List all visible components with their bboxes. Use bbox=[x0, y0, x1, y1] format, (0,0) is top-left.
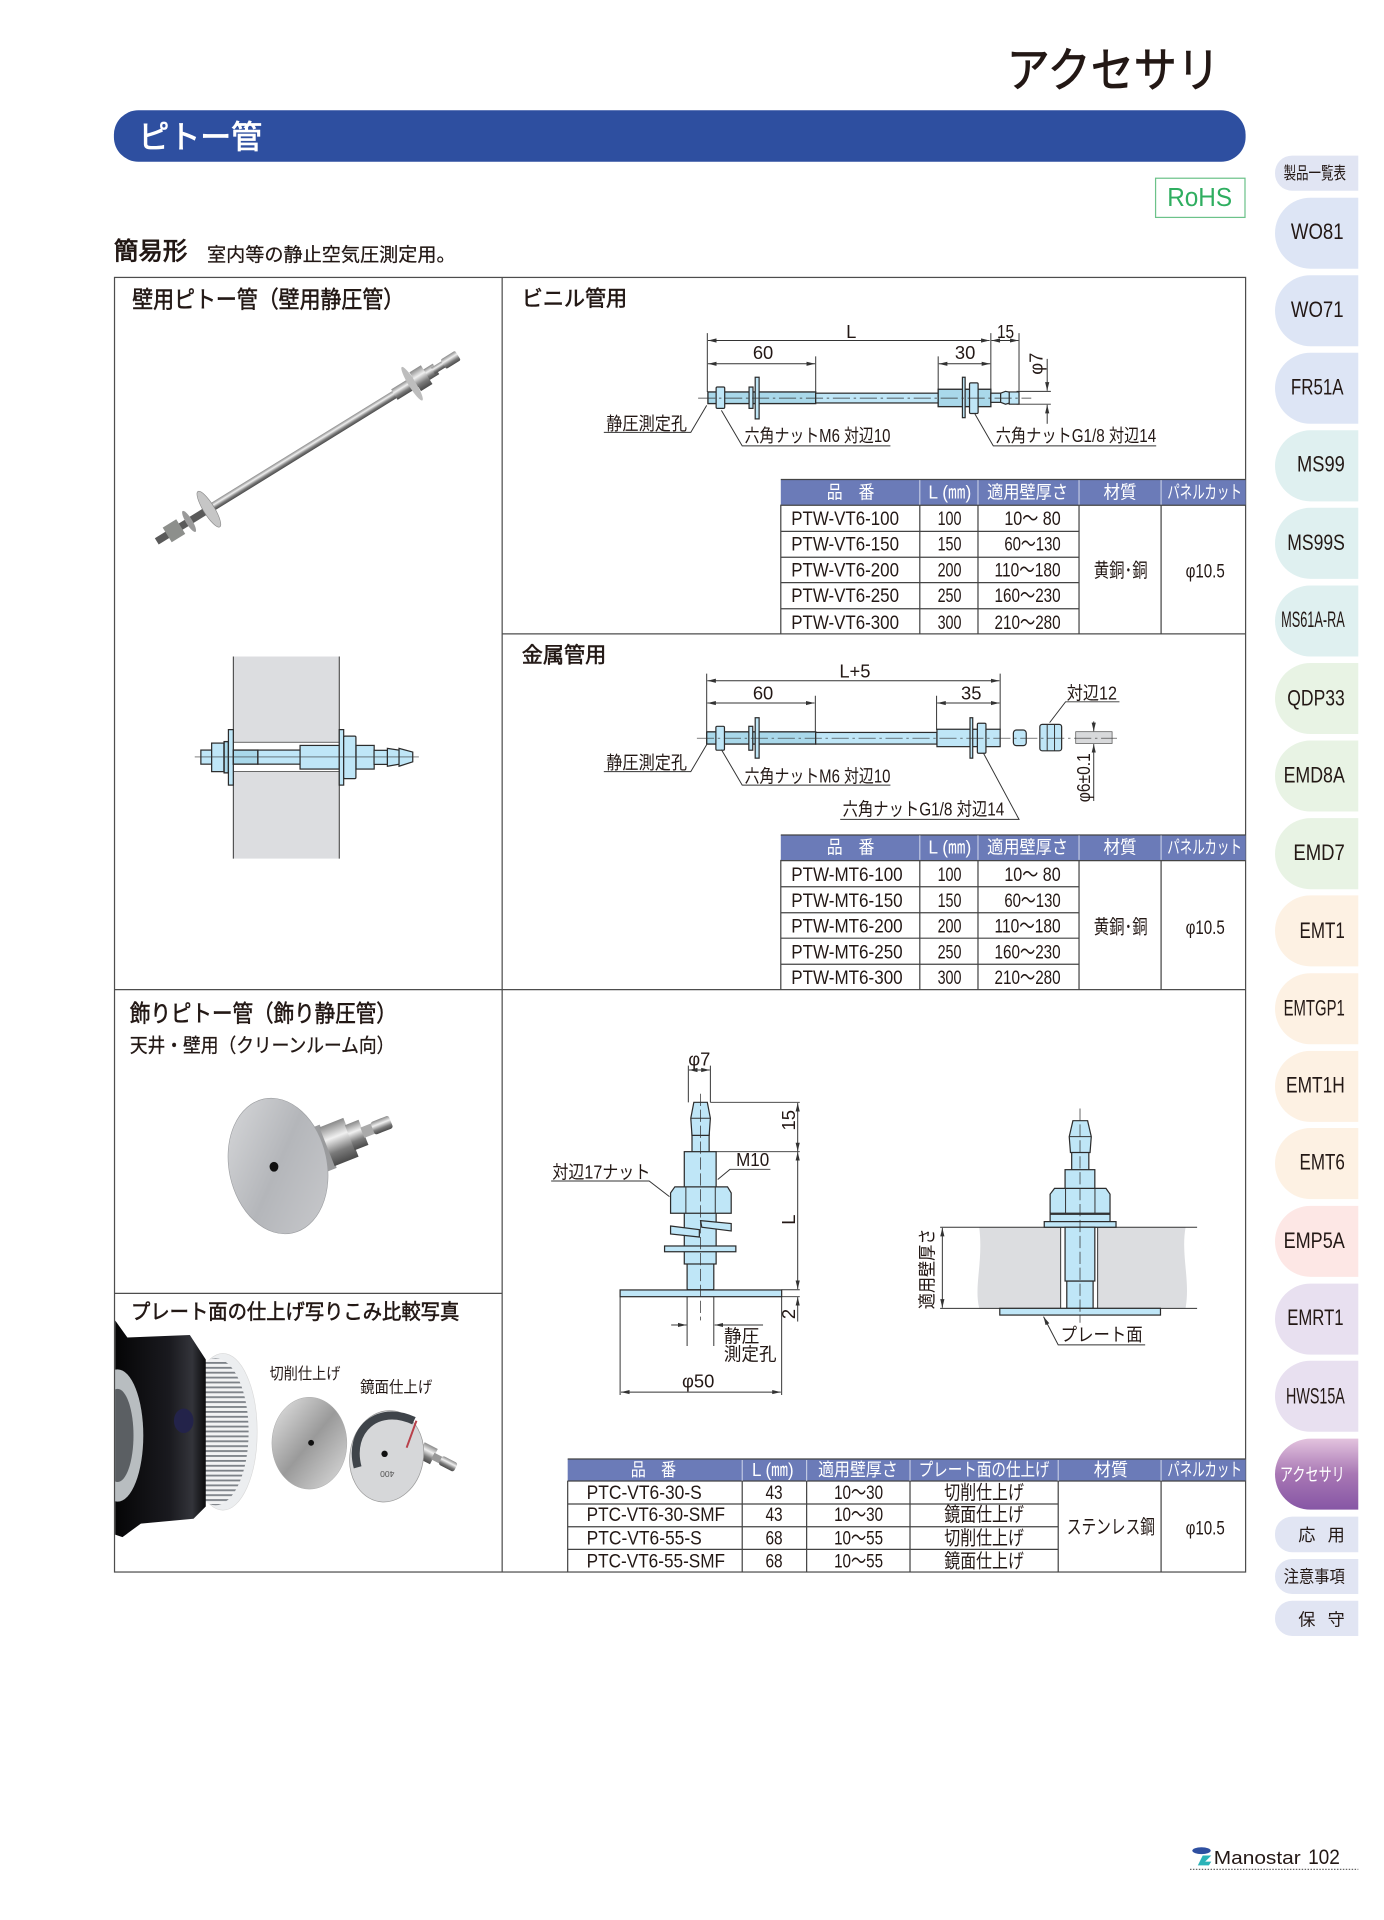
tab: HWS15A: HWS15A bbox=[1286, 1384, 1345, 1409]
diagram: vinyl tube dimensions: 静圧測定孔 bbox=[606, 413, 687, 434]
table: decorative tube models: 10～30 bbox=[834, 1504, 883, 1526]
diagram: vinyl tube dimensions: L bbox=[846, 321, 856, 342]
RoHS badge: RoHS bbox=[1167, 184, 1232, 212]
tab: WO81: WO81 bbox=[1291, 219, 1344, 244]
table: metal tube models: 200 bbox=[938, 916, 962, 938]
tab: EMD7 bbox=[1275, 818, 1358, 889]
photo: finish comparison discs: 400 bbox=[380, 1469, 394, 1479]
diagram: vinyl tube dimensions: 15 bbox=[997, 321, 1014, 342]
photo: decorative pitot tube bbox=[216, 1089, 399, 1243]
tab: EMT1: EMT1 bbox=[1299, 918, 1345, 943]
heading: wall pitot: 壁用ピトー管（壁用静圧管） bbox=[132, 286, 404, 312]
diagram: decorative tube dimensions: 対辺17ナット bbox=[552, 1161, 650, 1182]
table: decorative tube models: PTC-VT6-30-S bbox=[587, 1482, 702, 1504]
tab: EMD8A bbox=[1275, 741, 1358, 812]
table: metal tube models: PTW-MT6-200 bbox=[791, 916, 903, 938]
table: vinyl tube models: 110～180 bbox=[995, 559, 1061, 581]
tab: MS99S: MS99S bbox=[1287, 530, 1345, 555]
tab: WO71: WO71 bbox=[1291, 297, 1344, 322]
tab: maintenance: 保 守 bbox=[1298, 1609, 1345, 1629]
diagram: decorative tube wall mounting: プレート面 bbox=[1061, 1324, 1143, 1345]
table: decorative tube models: 10～30 bbox=[834, 1482, 883, 1504]
tab: application: 応 用 bbox=[1298, 1525, 1345, 1545]
table: vinyl tube models: PTW-VT6-300 bbox=[791, 612, 899, 634]
table: vinyl tube models: PTW-VT6-150 bbox=[791, 534, 899, 556]
table: decorative tube models: 品 番 bbox=[631, 1459, 676, 1480]
panel: metal tube bbox=[522, 644, 1246, 990]
table: decorative tube models bbox=[568, 1459, 1246, 1573]
photo: wall pitot tube bbox=[146, 338, 469, 559]
tab: product list bbox=[1275, 156, 1358, 191]
tab: MS99: MS99 bbox=[1297, 452, 1345, 477]
table: decorative tube models: 10～55 bbox=[834, 1527, 883, 1549]
table: metal tube models: パネルカット bbox=[1167, 837, 1242, 858]
table: metal tube models: L (㎜) bbox=[928, 837, 971, 858]
diagram: decorative tube dimensions: M10 bbox=[736, 1149, 769, 1170]
table: metal tube models: 160～230 bbox=[995, 941, 1061, 963]
table: metal tube models: 100 bbox=[938, 864, 962, 886]
tab: MS99 bbox=[1275, 430, 1358, 501]
table: metal tube models: 300 bbox=[938, 967, 962, 989]
table: vinyl tube models: 150 bbox=[938, 534, 962, 556]
diagram: metal tube dimensions: 対辺12 bbox=[1067, 682, 1117, 703]
main frame bbox=[115, 277, 1246, 1572]
table: decorative tube models: φ10.5 bbox=[1186, 1518, 1225, 1540]
table: vinyl tube models: φ10.5 bbox=[1186, 561, 1225, 583]
diagram: vinyl tube dimensions: φ7 bbox=[1025, 353, 1046, 375]
tab: FR51A: FR51A bbox=[1291, 374, 1344, 399]
table: decorative tube models: 10～55 bbox=[834, 1551, 883, 1573]
tab: MS61A-RA bbox=[1275, 585, 1358, 656]
table: vinyl tube models: 250 bbox=[938, 585, 962, 607]
table: vinyl tube models: PTW-VT6-250 bbox=[791, 585, 899, 607]
label: mirror finish: 鏡面仕上げ bbox=[360, 1379, 432, 1397]
tab: EMT1H bbox=[1275, 1051, 1358, 1122]
table: decorative tube models: 68 bbox=[765, 1551, 783, 1573]
table: metal tube models: φ10.5 bbox=[1186, 917, 1225, 939]
table: vinyl tube models: PTW-VT6-200 bbox=[791, 559, 899, 581]
table: decorative tube models: L (㎜) bbox=[752, 1459, 794, 1480]
diagram: decorative tube dimensions: 静圧 bbox=[724, 1325, 759, 1346]
table: vinyl tube models: L (㎜) bbox=[928, 482, 971, 503]
table: vinyl tube models: 黄銅･銅 bbox=[1094, 560, 1148, 582]
diagram: metal tube dimensions: 60 bbox=[753, 682, 773, 703]
section heading bar: ピトー管 bbox=[138, 119, 262, 155]
table: metal tube models: 210～280 bbox=[995, 967, 1061, 989]
diagram: metal tube dimensions: φ6±0.1 bbox=[1073, 753, 1094, 802]
table: metal tube models: 110～180 bbox=[995, 916, 1061, 938]
tab: EMTGP1: EMTGP1 bbox=[1284, 995, 1345, 1020]
tab: EMP5A: EMP5A bbox=[1284, 1228, 1345, 1253]
tab: EMT1 bbox=[1275, 895, 1358, 966]
table: metal tube models: PTW-MT6-100 bbox=[791, 864, 903, 886]
table: vinyl tube models: 100 bbox=[938, 508, 962, 530]
table: vinyl tube models bbox=[781, 480, 1246, 634]
panel: vinyl tube bbox=[522, 287, 1246, 634]
table: decorative tube models: 材質 bbox=[1094, 1459, 1128, 1480]
table: decorative tube models: 切削仕上げ bbox=[944, 1527, 1024, 1549]
subheading bbox=[114, 238, 456, 266]
tab: EMT1H: EMT1H bbox=[1286, 1073, 1345, 1098]
table: metal tube models: PTW-MT6-250 bbox=[791, 941, 903, 963]
table: decorative tube models: 68 bbox=[765, 1527, 783, 1549]
panel: decorative tube drawings bbox=[551, 1049, 1246, 1573]
photo: finish comparison discs bbox=[272, 1397, 460, 1508]
tab: EMRT1 bbox=[1275, 1284, 1358, 1355]
table: metal tube models: 黄銅･銅 bbox=[1094, 916, 1148, 938]
table: decorative tube models: 43 bbox=[765, 1504, 783, 1526]
table: vinyl tube models: PTW-VT6-100 bbox=[791, 508, 899, 530]
diagram: decorative tube dimensions: 2 bbox=[778, 1309, 799, 1319]
table: metal tube models bbox=[781, 835, 1246, 990]
subheading: ceiling and wall use: 天井・壁用（クリーンルーム向） bbox=[130, 1035, 394, 1057]
tab: maintenance bbox=[1275, 1601, 1358, 1636]
tab: EMT6: EMT6 bbox=[1299, 1150, 1345, 1175]
table: decorative tube models: パネルカット bbox=[1167, 1459, 1242, 1480]
diagram: decorative tube wall mounting: 適用壁厚さ bbox=[916, 1228, 937, 1309]
title: アクセサリ bbox=[1007, 45, 1220, 98]
diagram: wall mounting section bbox=[195, 656, 419, 859]
tab: EMRT1: EMRT1 bbox=[1287, 1305, 1344, 1330]
footer: logo and page number: 102 bbox=[1308, 1846, 1340, 1869]
table: vinyl tube models: 10～ 80 bbox=[1004, 508, 1061, 530]
table: vinyl tube models: 60～130 bbox=[1004, 534, 1061, 556]
RoHS badge bbox=[1156, 178, 1245, 217]
diagram: metal tube dimensions: 六角ナットG1/8 対辺14 bbox=[843, 799, 1004, 820]
tab: EMTGP1 bbox=[1275, 973, 1358, 1044]
table: vinyl tube models: パネルカット bbox=[1167, 482, 1242, 503]
table: metal tube models: PTW-MT6-300 bbox=[791, 967, 903, 989]
diagram: decorative tube dimensions bbox=[551, 1049, 800, 1395]
tab: EMD7: EMD7 bbox=[1293, 840, 1345, 865]
tab: WO81 bbox=[1275, 198, 1358, 269]
table: vinyl tube models: 200 bbox=[938, 559, 962, 581]
panel: plate finish comparison bbox=[92, 1301, 460, 1537]
tab: MS99S bbox=[1275, 508, 1358, 579]
table: metal tube models: 150 bbox=[938, 890, 962, 912]
tab: application bbox=[1275, 1517, 1358, 1552]
diagram: metal tube dimensions: L+5 bbox=[839, 660, 870, 681]
heading: plate finish comparison: プレート面の仕上げ写りこみ比較写真 bbox=[131, 1301, 459, 1324]
diagram: decorative tube wall mounting bbox=[916, 1108, 1197, 1345]
diagram: decorative tube dimensions: φ50 bbox=[682, 1371, 714, 1392]
tab: accessories active bbox=[1275, 1439, 1358, 1510]
table: decorative tube models: ステンレス鋼 bbox=[1067, 1516, 1155, 1538]
table: metal tube models: 品 番 bbox=[827, 837, 874, 858]
table: metal tube models: 250 bbox=[938, 941, 962, 963]
tab: EMP5A bbox=[1275, 1206, 1358, 1277]
sidebar navigation tabs bbox=[1275, 156, 1358, 1636]
footer: logo and page number bbox=[1190, 1846, 1358, 1869]
tab: EMD8A: EMD8A bbox=[1284, 763, 1345, 788]
table: metal tube models: 60～130 bbox=[1004, 890, 1061, 912]
table: metal tube models: 適用壁厚さ bbox=[987, 837, 1068, 858]
tab: QDP33: QDP33 bbox=[1287, 685, 1345, 710]
diagram: vinyl tube dimensions: 60 bbox=[753, 342, 773, 363]
table: vinyl tube models: 材質 bbox=[1104, 482, 1137, 503]
table: decorative tube models: PTC-VT6-30-SMF bbox=[587, 1504, 725, 1526]
table: decorative tube models: PTC-VT6-55-S bbox=[587, 1527, 702, 1549]
panel: decorative pitot tube bbox=[130, 1000, 399, 1243]
table: metal tube models: 材質 bbox=[1104, 837, 1137, 858]
table: decorative tube models: 切削仕上げ bbox=[944, 1482, 1024, 1504]
diagram: metal tube dimensions: 静圧測定孔 bbox=[606, 752, 687, 773]
panel: wall pitot tube bbox=[132, 286, 469, 859]
table: metal tube models: 10～ 80 bbox=[1004, 864, 1061, 886]
tab: precautions: 注意事項 bbox=[1284, 1566, 1345, 1586]
table: decorative tube models: 鏡面仕上げ bbox=[944, 1504, 1024, 1526]
tab: product list: 製品一覧表 bbox=[1284, 163, 1346, 183]
diagram: decorative tube dimensions: L bbox=[778, 1215, 799, 1225]
tab: FR51A bbox=[1275, 353, 1358, 424]
subheading: 簡易形 bbox=[114, 238, 187, 266]
diagram: decorative tube dimensions: 15 bbox=[778, 1110, 799, 1130]
table: vinyl tube models: 300 bbox=[938, 612, 962, 634]
tab: HWS15A bbox=[1275, 1361, 1358, 1432]
diagram: metal tube dimensions bbox=[604, 660, 1119, 820]
tab: EMT6 bbox=[1275, 1128, 1358, 1199]
heading: decorative pitot: 飾りピトー管（飾り静圧管） bbox=[130, 1000, 397, 1026]
diagram: metal tube dimensions: 六角ナットM6 対辺10 bbox=[745, 766, 890, 787]
table: decorative tube models: 適用壁厚さ bbox=[818, 1459, 898, 1480]
section heading bar bbox=[114, 110, 1246, 162]
heading: metal: 金属管用 bbox=[522, 644, 606, 668]
diagram: vinyl tube dimensions: 六角ナットM6 対辺10 bbox=[745, 425, 890, 446]
table: vinyl tube models: 適用壁厚さ bbox=[987, 482, 1068, 503]
table: decorative tube models: 鏡面仕上げ bbox=[944, 1551, 1024, 1573]
table: vinyl tube models: 品 番 bbox=[827, 482, 874, 503]
table: metal tube models: PTW-MT6-150 bbox=[791, 890, 903, 912]
tab: accessories active: アクセサリ bbox=[1280, 1464, 1345, 1485]
table: decorative tube models: 43 bbox=[765, 1482, 783, 1504]
diagram: vinyl tube dimensions: 六角ナットG1/8 対辺14 bbox=[996, 425, 1156, 446]
footer: logo and page number: Manostar bbox=[1214, 1847, 1301, 1868]
diagram: decorative tube dimensions: 測定孔 bbox=[724, 1344, 777, 1365]
label: cut finish: 切削仕上げ bbox=[269, 1365, 341, 1383]
diagram: vinyl tube dimensions: 30 bbox=[955, 342, 975, 363]
tab: QDP33 bbox=[1275, 663, 1358, 734]
heading: vinyl: ビニル管用 bbox=[522, 287, 627, 311]
table: decorative tube models: PTC-VT6-55-SMF bbox=[587, 1551, 725, 1573]
table: vinyl tube models: 210～280 bbox=[995, 612, 1061, 634]
diagram: vinyl tube dimensions bbox=[604, 321, 1156, 446]
icon: Manostar logo bbox=[1192, 1847, 1211, 1865]
tab: WO71 bbox=[1275, 275, 1358, 346]
table: decorative tube models: プレート面の仕上げ bbox=[919, 1459, 1050, 1480]
table: vinyl tube models: 160～230 bbox=[995, 585, 1061, 607]
subheading: 室内等の静止空気圧測定用。 bbox=[207, 244, 456, 266]
photo: camera reflected object bbox=[115, 1320, 258, 1538]
diagram: decorative tube dimensions: φ7 bbox=[688, 1049, 710, 1070]
diagram: metal tube dimensions: 35 bbox=[961, 682, 981, 703]
tab: precautions bbox=[1275, 1559, 1358, 1594]
